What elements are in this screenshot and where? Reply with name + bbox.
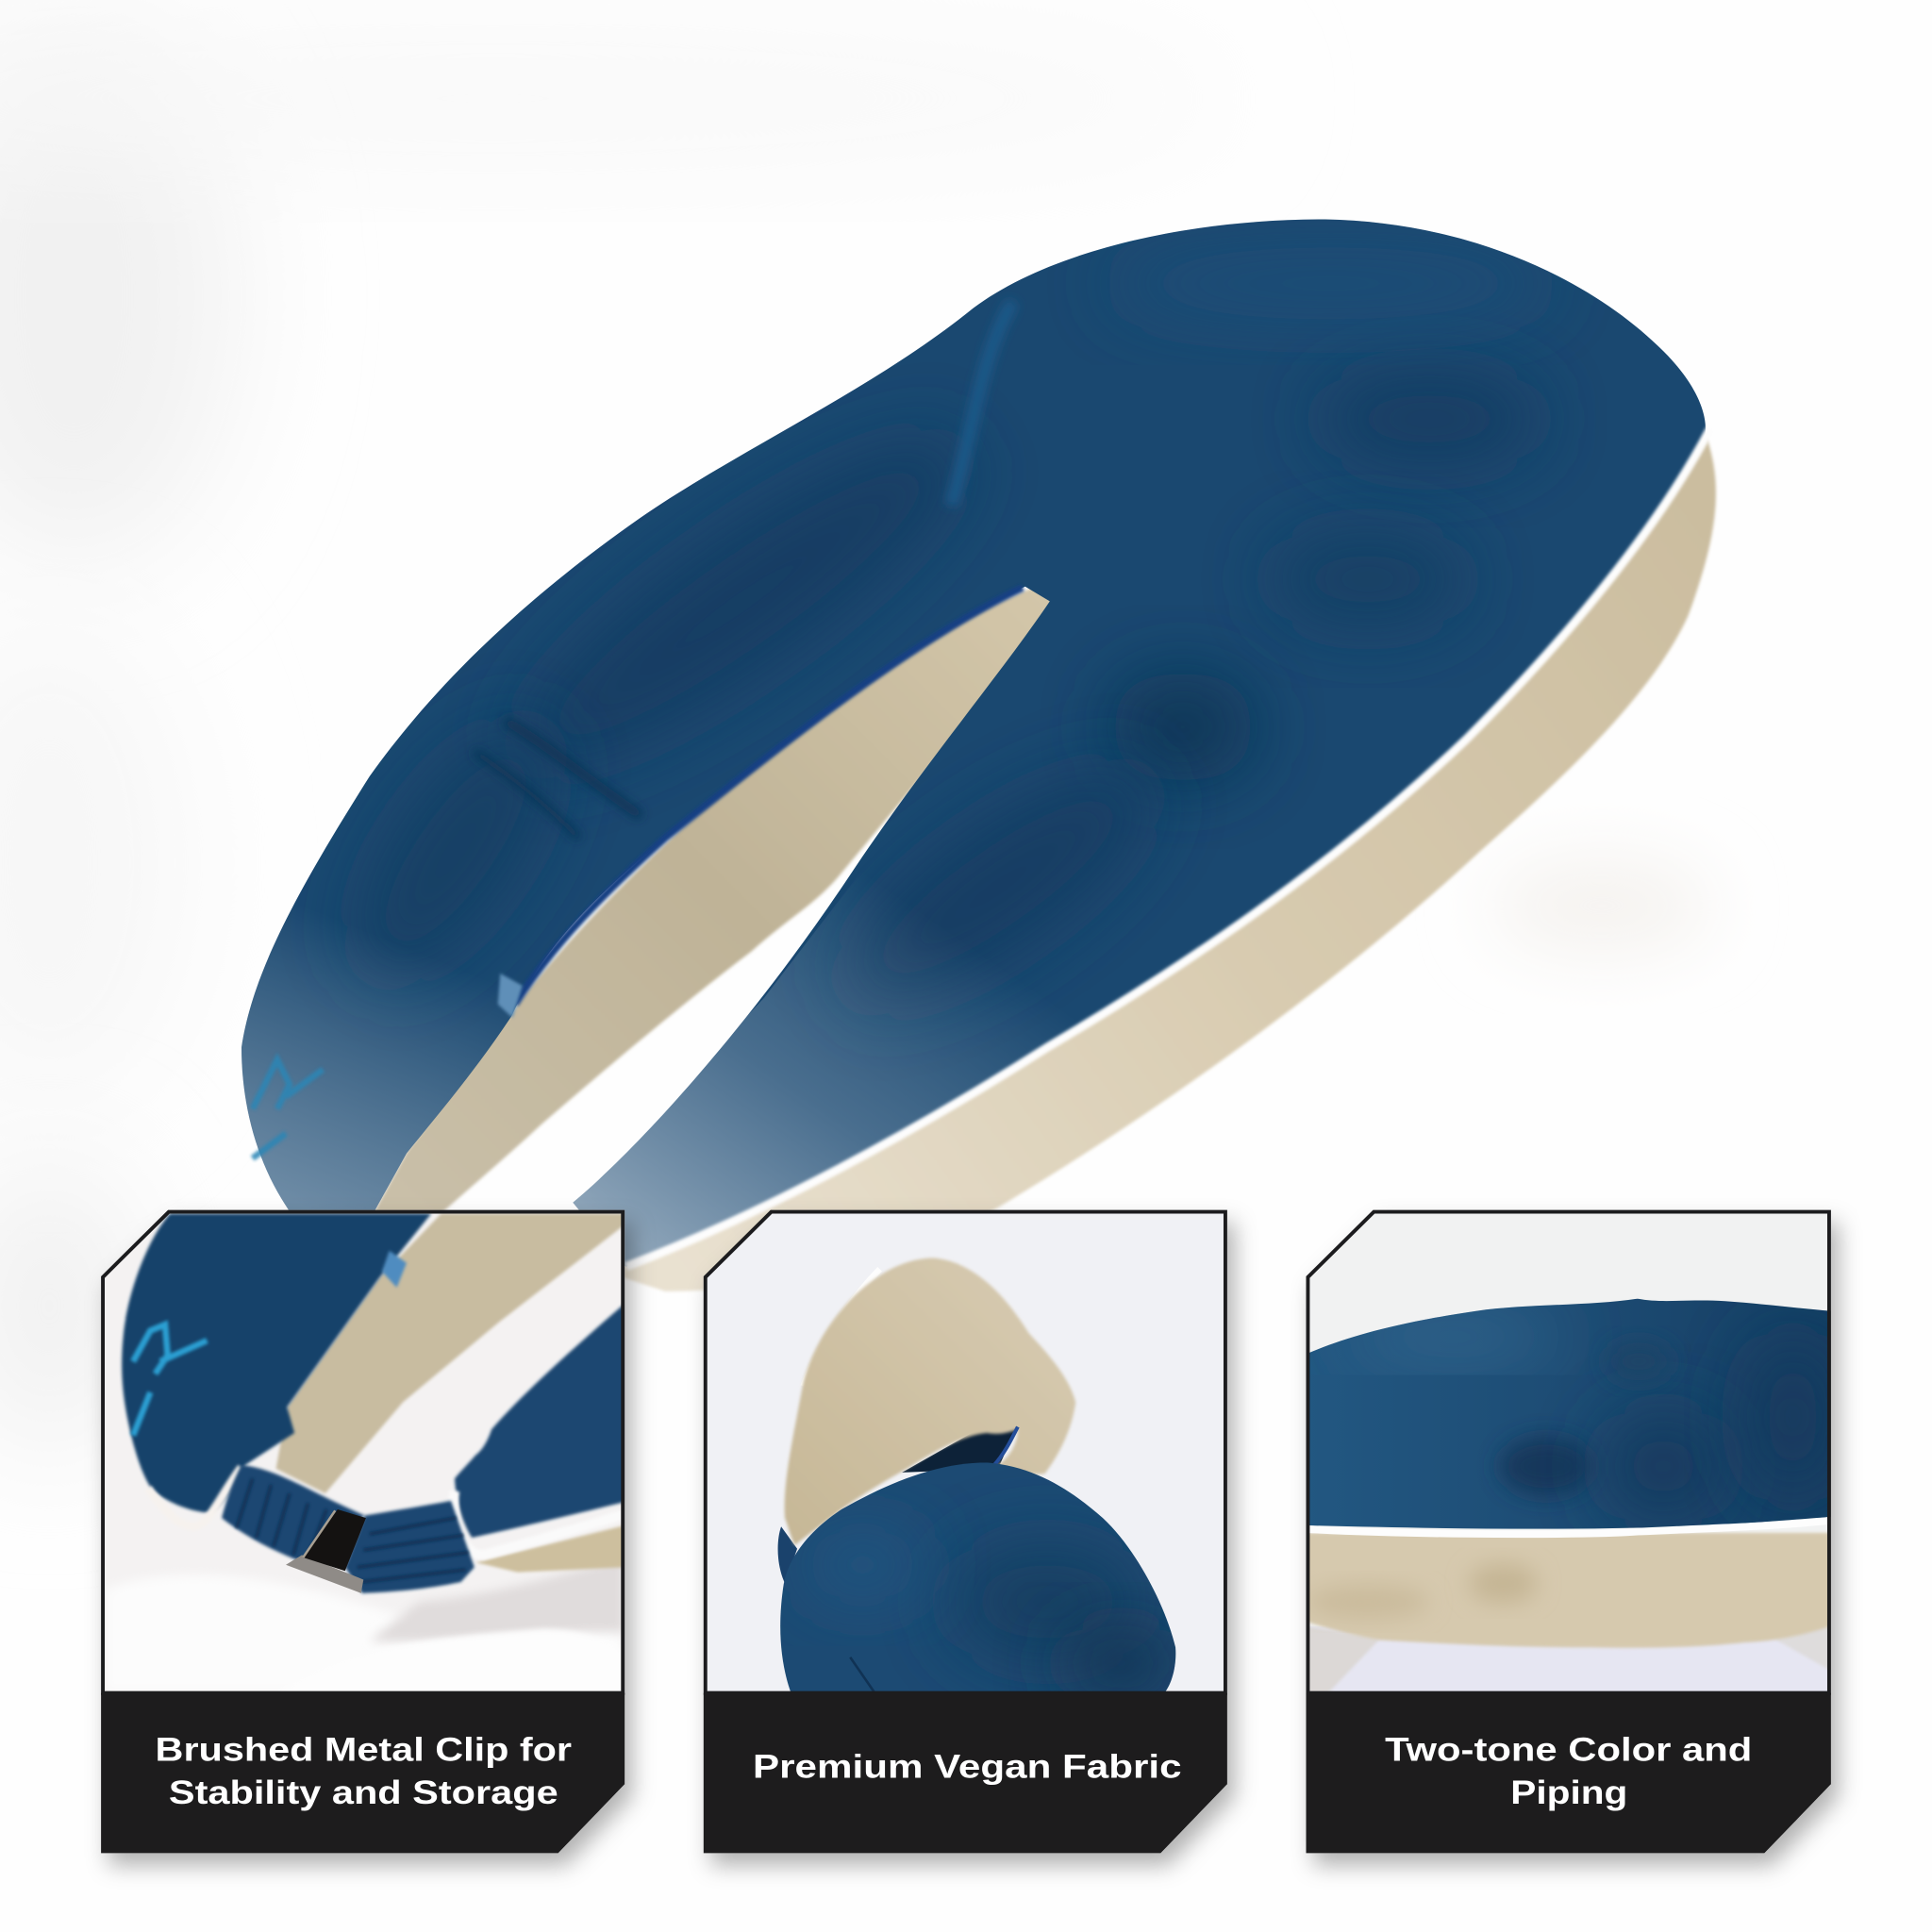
piping	[1306, 1521, 1831, 1534]
caption bar	[704, 1693, 1227, 1853]
zipper seam, upper	[951, 302, 1013, 506]
silver plate	[286, 1555, 363, 1593]
card frame	[101, 1210, 625, 1853]
beige right	[475, 1525, 625, 1573]
zipper pull	[498, 974, 523, 1018]
elastic behind	[778, 1526, 797, 1583]
caption text: Piping	[1510, 1774, 1627, 1811]
image border	[103, 1212, 623, 1693]
beige folded cover	[785, 1258, 1075, 1545]
panel: metal clip	[101, 1210, 625, 1853]
metal clip	[303, 1509, 366, 1571]
beige lower	[1306, 1533, 1831, 1648]
caption text: Brushed Metal Clip for	[156, 1731, 572, 1768]
zipper stitching	[993, 1426, 1018, 1466]
piping edge	[804, 1269, 880, 1386]
beige band	[276, 1214, 625, 1493]
piping left	[148, 1463, 242, 1515]
navy left	[122, 1214, 431, 1513]
piping right	[454, 1491, 625, 1555]
dark gap	[902, 1424, 1018, 1473]
logo	[133, 1324, 207, 1436]
beige inner panel, left arm	[370, 584, 1055, 1223]
caption bar	[101, 1693, 625, 1853]
caption text: Stability and Storage	[169, 1774, 558, 1811]
photo: clip closeup	[101, 1210, 625, 1693]
beige underside, right arm	[616, 434, 1716, 1291]
panel: vegan fabric	[704, 1210, 1227, 1853]
navy top	[1306, 1293, 1842, 1534]
photo: pillow side view	[1306, 1210, 1842, 1693]
caption bar	[1306, 1693, 1831, 1853]
caption text	[156, 1731, 572, 1811]
main product photo: neck pillow	[242, 219, 1718, 1292]
image border	[1307, 1212, 1829, 1693]
zipper pull	[382, 1251, 407, 1288]
panel: two-tone piping	[1306, 1210, 1842, 1853]
caption text: Premium Vegan Fabric	[753, 1749, 1182, 1786]
navy right	[455, 1304, 625, 1538]
navy velvet	[764, 1454, 1195, 1700]
caption text	[1385, 1731, 1752, 1811]
photo: folded pillow	[704, 1210, 1227, 1700]
card frame	[1306, 1210, 1831, 1853]
zipper along beige edge	[515, 588, 1023, 1004]
navy velvet cover	[242, 219, 1706, 1267]
card frame	[704, 1210, 1227, 1853]
image border	[706, 1212, 1225, 1693]
brand logo	[253, 1059, 323, 1158]
white piping	[626, 429, 1710, 1267]
elastic strap	[222, 1465, 365, 1562]
caption text: Two-tone Color and	[1385, 1731, 1752, 1768]
